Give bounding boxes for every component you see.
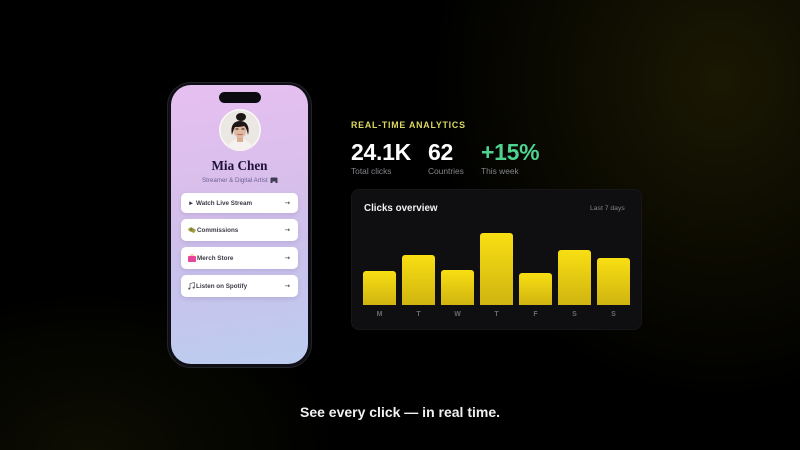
stat: this week: +15%: [481, 139, 539, 165]
stat: total clicks: Total clicks: [351, 166, 392, 176]
link: Commissions: →: [285, 226, 290, 234]
day labels: S: [611, 311, 616, 318]
icon: gamepad: [270, 178, 278, 183]
day labels: W: [454, 311, 461, 318]
link: Merch Store: [181, 247, 298, 269]
link: Watch Live Stream: →: [285, 199, 290, 207]
bar T: [402, 255, 435, 305]
link: Commissions: Commissions: [197, 226, 238, 234]
bar M: [363, 271, 396, 305]
caption: See every click — in real time.: [300, 404, 500, 420]
bar S last: [597, 258, 630, 305]
chart card: [351, 189, 642, 330]
link: Watch Live Stream: ► Watch Live Stream: [188, 200, 252, 206]
link: Merch Store: Merch Store: [197, 254, 233, 262]
stat: total clicks: 24.1K: [351, 139, 411, 165]
stat: countries: Countries: [428, 166, 464, 176]
bar T peak: [480, 233, 513, 305]
name: Mia Chen: [211, 158, 268, 173]
link: Listen on Spotify: →: [285, 282, 290, 290]
day labels: S: [572, 311, 577, 318]
day labels: F: [533, 311, 538, 318]
day labels: T: [494, 311, 499, 318]
phone: [167, 82, 312, 368]
bar W: [441, 270, 474, 305]
bar S: [558, 250, 591, 305]
link: Watch Live Stream: [181, 193, 298, 213]
stat: countries: 62: [428, 139, 453, 165]
day labels: T: [416, 311, 421, 318]
link: Commissions: [181, 219, 298, 241]
subtitle: Streamer & Digital Artist: [202, 177, 268, 184]
day labels: [377, 311, 616, 318]
phone screen: [171, 85, 308, 364]
link: Listen on Spotify: [181, 275, 298, 297]
chart title: Clicks overview: [364, 203, 438, 214]
link: Merch Store: →: [285, 254, 290, 262]
range badge: Last 7 days: [590, 205, 625, 212]
bar F: [519, 273, 552, 305]
eyebrow heading: REAL-TIME ANALYTICS: [351, 120, 466, 130]
avatar: [219, 109, 261, 151]
bar chart: [363, 233, 630, 305]
stat: countries: [428, 139, 464, 176]
notch: [219, 92, 261, 103]
stat: this week: This week: [481, 166, 519, 176]
link: Listen on Spotify: Listen on Spotify: [196, 282, 247, 290]
day labels: M: [377, 311, 382, 318]
